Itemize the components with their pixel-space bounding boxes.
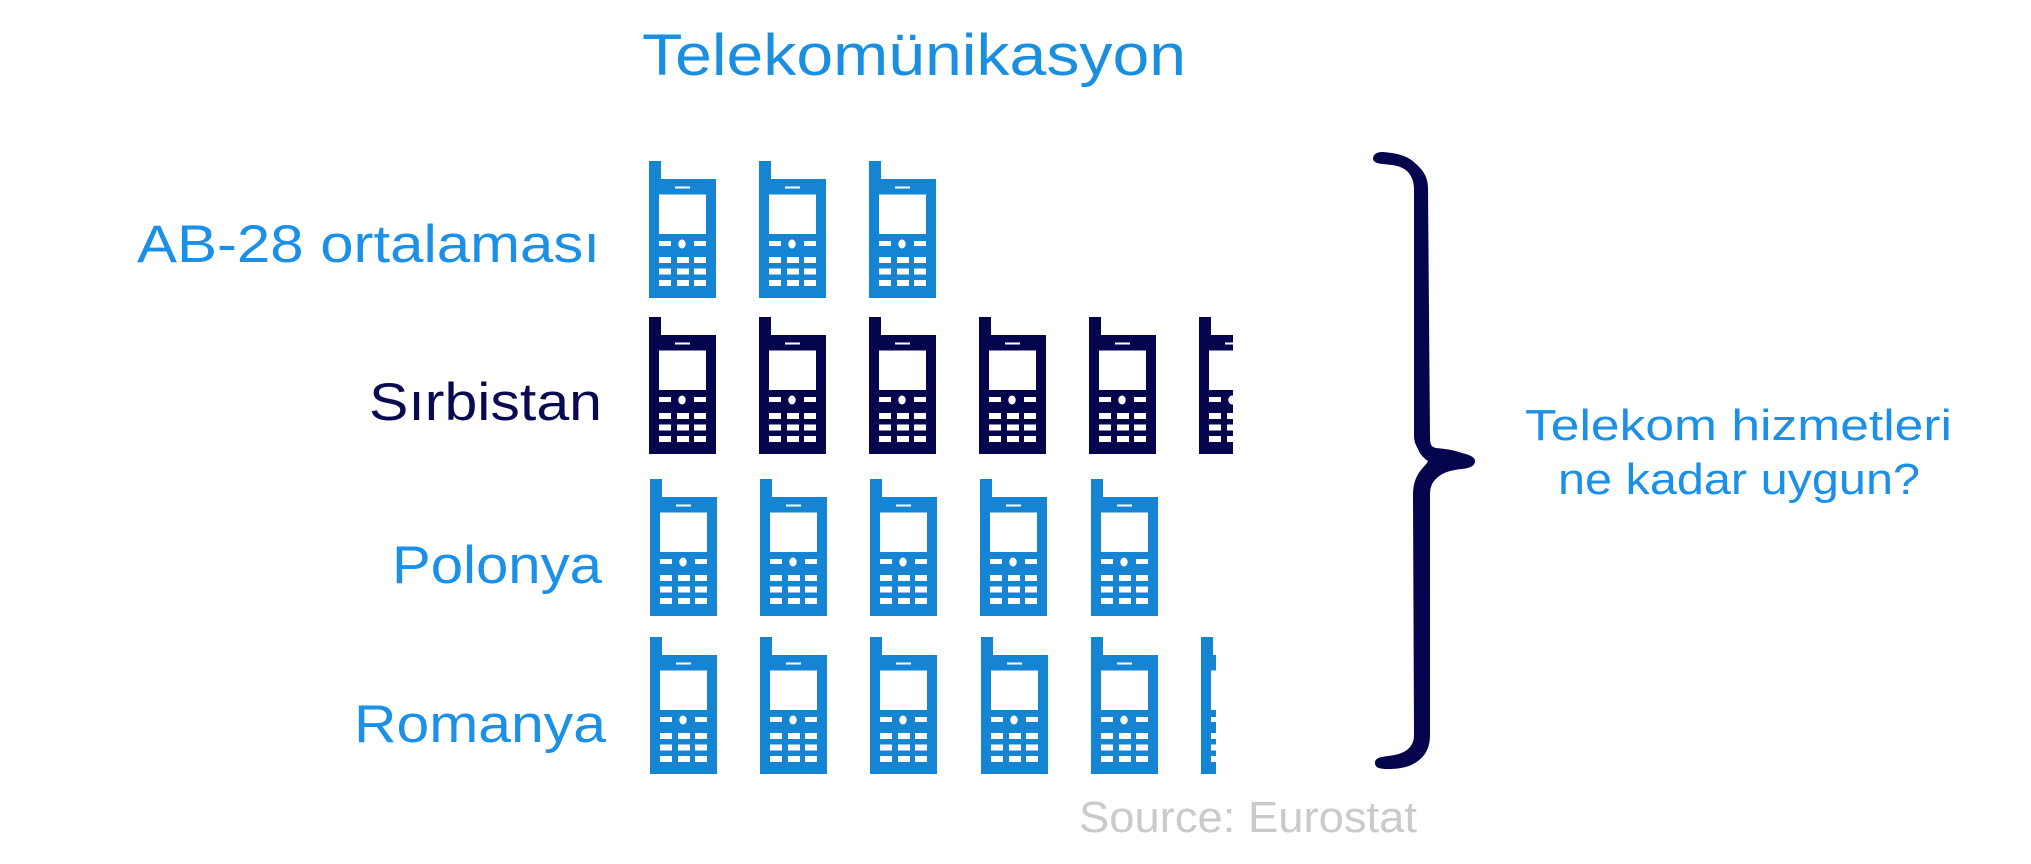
phone icons: Sırbistan — [649, 317, 1266, 454]
curly brace — [1373, 152, 1475, 769]
row: Polonya — [392, 479, 1158, 616]
side question: ne kadar uygun? — [1558, 455, 1920, 504]
side question: Telekom hizmetleri — [1525, 401, 1952, 450]
phone icons: AB-28 ortalaması — [649, 161, 936, 298]
source note: Source: Eurostat — [1079, 793, 1417, 842]
label: AB-28 ortalaması: AB-28 ortalaması — [137, 215, 600, 274]
label: Romanya: Romanya — [354, 695, 607, 754]
side question — [1525, 401, 1952, 504]
label: Polonya: Polonya — [392, 536, 603, 595]
row: Romanya — [354, 637, 1268, 774]
phone icons: Romanya — [650, 637, 1268, 774]
row: AB-28 ortalaması — [137, 161, 936, 298]
phone icons: Polonya — [650, 479, 1158, 616]
row: Sırbistan — [369, 317, 1266, 454]
label: Sırbistan: Sırbistan — [369, 373, 602, 432]
title: Telekomünikasyon — [642, 23, 1186, 88]
